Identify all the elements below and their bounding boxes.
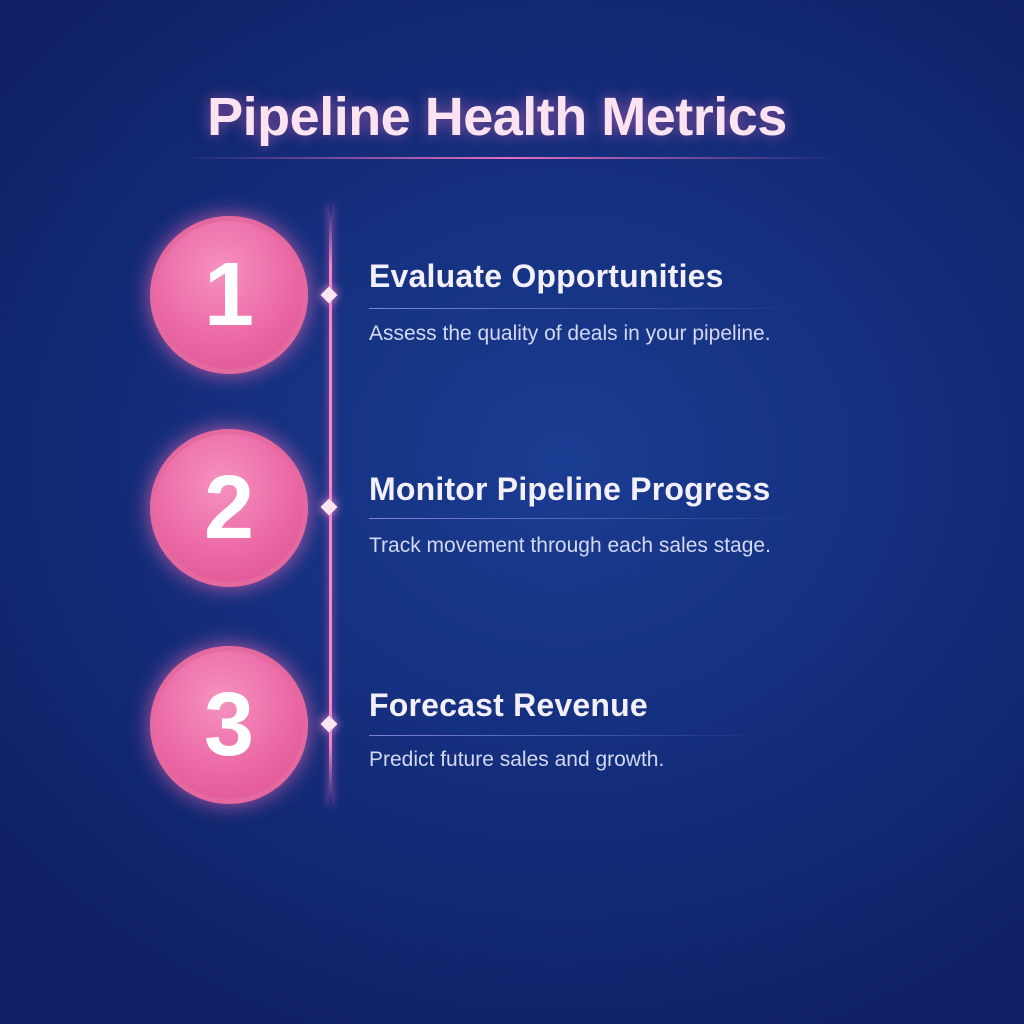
diamond 1 (321, 287, 337, 303)
step 2 badge: 2 (204, 458, 254, 558)
step 2 badge (150, 429, 308, 587)
step 3 text: Predict future sales and growth. (369, 748, 664, 771)
timeline line (329, 205, 332, 805)
step 1 badge: 1 (204, 245, 254, 345)
step 3 badge (150, 646, 308, 804)
step 2 text: Track movement through each sales stage. (369, 534, 771, 557)
diamond 2 (321, 499, 337, 515)
step 1 text: Assess the quality of deals in your pipeline. (369, 322, 771, 345)
step 1 badge (150, 216, 308, 374)
title: Pipeline Health Metrics (207, 87, 787, 147)
diamond 3 (321, 716, 337, 732)
step 3 badge: 3 (204, 675, 254, 775)
step 3 heading: Forecast Revenue (369, 687, 648, 723)
step 2 heading: Monitor Pipeline Progress (369, 471, 771, 507)
step 1 heading: Evaluate Opportunities (369, 258, 724, 294)
